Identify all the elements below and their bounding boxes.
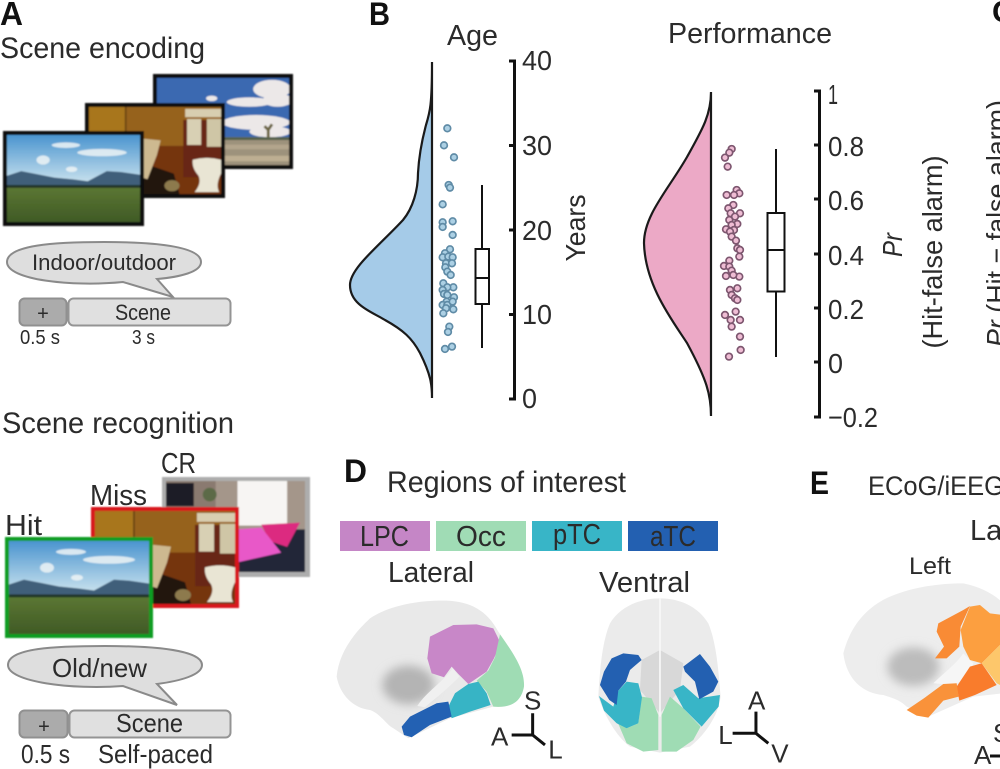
panel C: clipped letter and axis label (981, 0, 1000, 347)
recognition image stack with outcome labels (5, 448, 310, 638)
age axis: 0 (522, 383, 537, 414)
legend: region swatches: LPC (360, 521, 409, 553)
lateral orientation axes: L (548, 735, 563, 765)
performance data points (721, 146, 744, 360)
recognition image stack with outcome labels: CR (161, 448, 196, 480)
legend: region swatches: pTC (553, 519, 601, 551)
age half violin (350, 62, 432, 398)
performance axis: 0.8 (828, 131, 864, 162)
legend: region swatches: aTC (650, 521, 696, 553)
heading: performance: Performance (668, 18, 832, 50)
label: left: Left (909, 553, 951, 580)
ventral orientation axes: L (718, 720, 733, 750)
legend: region swatches (340, 519, 718, 553)
encoding timeline (20, 298, 230, 349)
heading: scene encoding: Scene encoding (0, 32, 205, 65)
performance axis: 1 (828, 79, 838, 110)
lateral orientation axes (491, 685, 563, 765)
panel B: age and performance distributions (350, 0, 948, 433)
performance box plot (767, 149, 785, 357)
label: lateral: Lateral (388, 557, 474, 589)
panel D: regions of interest (337, 453, 789, 768)
legend: region swatches: Occ (456, 521, 506, 553)
recognition timeline: + (38, 716, 50, 738)
performance axis (814, 79, 948, 433)
performance axis: 0.2 (828, 294, 864, 325)
age axis: Years (560, 194, 591, 262)
performance axis: 0 (828, 348, 843, 379)
age box plot (475, 185, 489, 348)
performance axis: 0.4 (828, 240, 864, 271)
panel letter E: E (810, 465, 829, 501)
age axis: 30 (522, 130, 552, 161)
performance axis: (Hit-false alarm) (917, 156, 948, 348)
ventral brain (598, 598, 721, 753)
encoding timeline: 3 s (132, 327, 155, 349)
recognition timeline: 0.5 s (21, 739, 70, 769)
ventral orientation axes: A (748, 685, 766, 715)
heading: regions of interest: Regions of interest (387, 466, 627, 499)
speech bubble: old/new (8, 646, 202, 705)
lateral orientation axes: S (524, 685, 541, 715)
encoding timeline: + (37, 303, 49, 325)
performance axis: Pr (877, 232, 908, 257)
left hemisphere brain (843, 583, 1000, 718)
panel E: ECoG/iEEG coverage (810, 465, 1000, 769)
lateral orientation axes: A (491, 722, 509, 752)
performance axis: −0.2 (828, 402, 878, 433)
age axis (509, 45, 591, 414)
recognition image stack with outcome labels: Miss (90, 480, 147, 512)
ventral orientation axes (718, 685, 789, 768)
recognition timeline (20, 708, 230, 769)
panel A: scene encoding and recognition task (0, 0, 310, 769)
encoding timeline: Scene (115, 300, 171, 325)
age axis: 20 (522, 215, 552, 246)
age data points (439, 125, 457, 352)
recognition timeline: Scene (116, 708, 183, 738)
ventral orientation axes: V (771, 738, 789, 768)
recognition image stack with outcome labels: Hit (5, 510, 42, 542)
orientation axes, clipped (974, 718, 1000, 769)
performance half violin (644, 92, 711, 416)
age axis: 40 (522, 45, 552, 76)
speech bubble: indoor/outdoor: Indoor/outdoor (32, 250, 176, 275)
performance axis: 0.6 (828, 185, 864, 216)
encoding timeline: 0.5 s (20, 327, 60, 349)
heading: age: Age (447, 20, 498, 52)
encoding image stack (3, 74, 293, 226)
age axis: 10 (522, 299, 552, 330)
speech bubble: old/new: Old/new (52, 653, 147, 683)
label: ventral: Ventral (599, 567, 690, 599)
panel letter D: D (344, 453, 367, 489)
lateral brain (337, 601, 524, 738)
recognition timeline: Self-paced (98, 739, 213, 769)
heading: scene recognition: Scene recognition (2, 407, 234, 440)
speech bubble: indoor/outdoor (7, 242, 201, 297)
